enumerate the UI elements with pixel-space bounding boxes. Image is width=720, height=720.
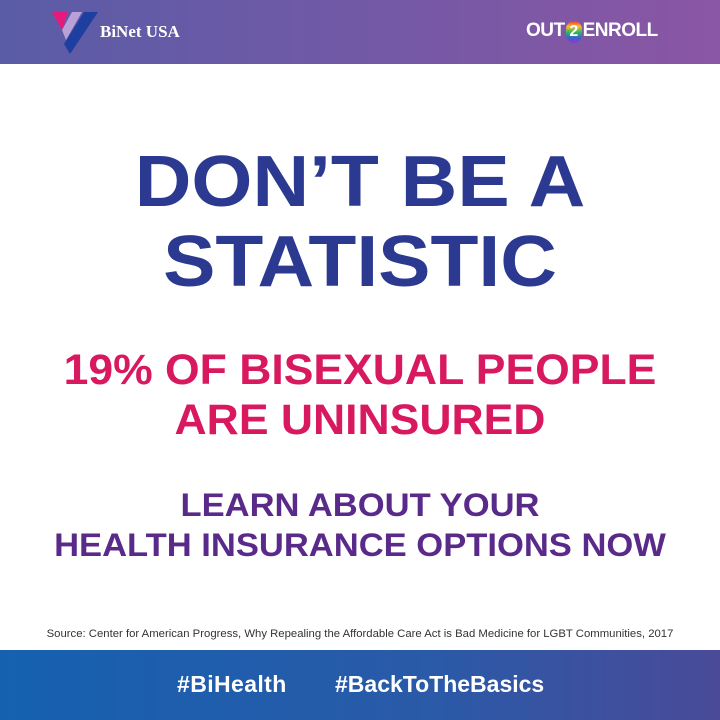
statistic text <box>64 346 656 444</box>
title: STATISTIC <box>163 222 557 302</box>
call to action: HEALTH INSURANCE OPTIONS NOW <box>54 527 666 563</box>
title: DON’T BE A <box>135 142 585 222</box>
hashtag BackToTheBasics: #BackToTheBasics <box>335 671 544 697</box>
title <box>135 142 585 302</box>
call to action: LEARN ABOUT YOUR <box>180 487 540 523</box>
logo: BiNet USA <box>52 12 180 54</box>
call to action <box>54 487 666 563</box>
footer bar with hashtags <box>0 650 720 720</box>
logo: Out2Enroll: OUT ENROLL <box>526 20 658 41</box>
source note: Source: Center for American Progress, Why Repealing the Affordable Care Act is Bad Medicine for LGBT Communities, 2017 <box>47 628 673 640</box>
statistic text: 19% OF BISEXUAL PEOPLE <box>64 346 656 394</box>
header bar <box>0 0 720 64</box>
logo: Out2Enroll: 2 <box>569 23 578 40</box>
statistic text: ARE UNINSURED <box>175 396 545 444</box>
hashtag BiHealth: #BiHealth <box>177 671 287 697</box>
logo: BiNet USA: BiNet USA <box>100 22 180 41</box>
